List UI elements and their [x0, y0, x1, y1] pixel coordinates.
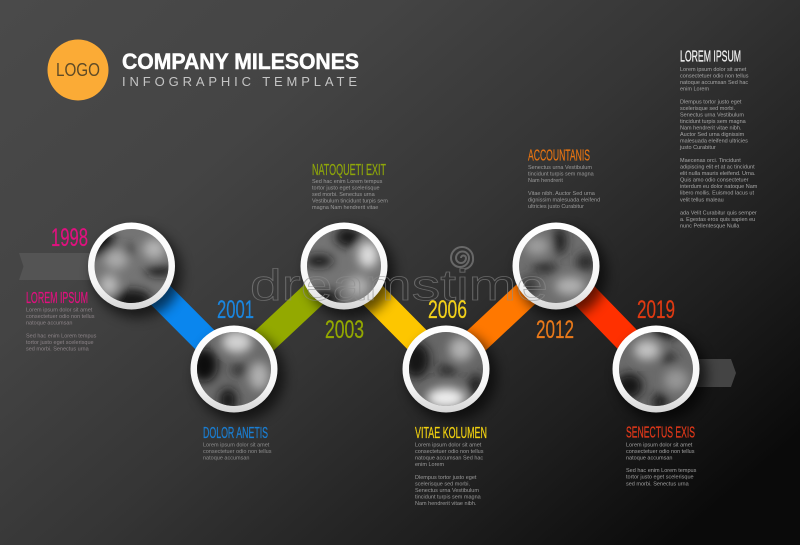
text block: Vitae Kolumen: tincidunt turpis sem magna	[415, 494, 482, 500]
text block: Dolor Anetis: natoque accumsan	[203, 456, 249, 462]
text block: Lorem Ipsum: LOREM IPSUM	[26, 290, 88, 307]
text block: Lorem Ipsum: Sed hac enim Lorem tempus	[26, 334, 97, 340]
text block: top right: velit tellus maleau	[680, 197, 724, 203]
title	[122, 49, 359, 89]
watermark: dreamstime	[250, 261, 548, 310]
text block: Natoqueti Exit: Sed hac enim Lorem tempus	[312, 179, 383, 185]
text block: top right: libero mollis. Euismod lacus ut	[680, 191, 754, 197]
text block: Accountanis	[528, 148, 602, 210]
year 2019: 2019	[637, 296, 675, 324]
text block: Vitae Kolumen: scelerisque sed morbi.	[415, 482, 470, 488]
text block: Lorem Ipsum: natoque accumsan	[26, 321, 72, 327]
text block: Dolor Anetis: DOLOR ANETIS	[203, 425, 268, 442]
photo 4	[409, 332, 483, 406]
text block: Vitae Kolumen: Lorem ipsum dolor sit amet	[415, 442, 482, 448]
logo badge: LOGO	[56, 60, 100, 80]
text block: top right: scelerisque sed morbi.	[680, 106, 735, 112]
text block: top right: justo Curabitur	[679, 145, 716, 151]
text block: top right: enim Lorem	[680, 86, 709, 92]
text block: top right: Nam hendrerit vitae nibh.	[680, 126, 742, 132]
text block: Lorem Ipsum	[26, 290, 98, 352]
text block: Accountanis: Vitae nibh. Auctor Sed urna	[528, 191, 596, 197]
photo 2	[197, 332, 271, 406]
text block: Senectus Exis: SENECTUS EXIS	[626, 425, 695, 442]
text block: Accountanis: ACCOUNTANIS	[528, 148, 590, 165]
text block: Vitae Kolumen: Dlempus tortor justo eget	[415, 475, 477, 481]
text block: Vitae Kolumen: VITAE KOLUMEN	[415, 425, 487, 442]
text block: top right: natoque accumsan Sed hac	[680, 80, 748, 86]
text block: Natoqueti Exit	[312, 162, 389, 211]
text block: Accountanis: ultricies justo Curabitur	[528, 204, 584, 210]
text block: Natoqueti Exit: sed morbi. Senectus urna	[312, 192, 376, 198]
text block: top right: elit nulla mauris eleifend. Urna.	[680, 171, 756, 177]
milestone 2019	[612, 325, 707, 421]
text block: top right: Auctor Sed urna dignissim	[680, 132, 745, 138]
text block: Lorem Ipsum: consectetuer odio non tellus	[26, 314, 95, 320]
text block: Vitae Kolumen: natoque accumsan Sed hac	[415, 456, 483, 462]
text block: Lorem Ipsum: sed morbi. Senectus urna	[26, 346, 90, 352]
milestone 2006	[402, 326, 497, 421]
logo badge	[48, 40, 108, 100]
milestone 1998	[81, 222, 182, 318]
year 1998: 1998	[51, 224, 88, 252]
flag: timeline start	[19, 253, 92, 280]
text block: Dolor Anetis: consectetuer odio non tellus	[203, 449, 272, 455]
milestone 2003	[300, 222, 395, 318]
text block: top right: a. Egestas eros quis sapien eu	[680, 217, 755, 223]
text block: Natoqueti Exit: tortor justo eget scelerisque	[312, 186, 380, 192]
text block: top right: Lorem ipsum dolor sit amet	[680, 67, 747, 73]
text block: top right: LOREM IPSUM	[680, 49, 741, 66]
text block: Senectus Exis: Lorem ipsum dolor sit amet	[626, 442, 693, 448]
connector ribbons	[132, 266, 656, 369]
text block: Senectus Exis: natoque accumsan	[626, 456, 672, 462]
text block: top right: nunc Pellentesque Nulla	[680, 224, 740, 230]
text block: top right: Quis amo odio consectetuer	[680, 178, 749, 184]
text block: Vitae Kolumen: Senectus urna Vestibulum	[415, 488, 479, 494]
photo 3	[307, 229, 381, 303]
year 2001: 2001	[217, 296, 254, 324]
text block: top right: interdum eu dolor natoque Nam	[680, 184, 758, 190]
text block: Vitae Kolumen: Nam hendrerit vitae nibh.	[415, 501, 477, 507]
year 2006: 2006	[428, 296, 467, 324]
text block: Senectus Exis	[626, 425, 698, 487]
text block: Dolor Anetis: Lorem ipsum dolor sit amet	[203, 442, 270, 448]
milestone 2001	[190, 326, 285, 421]
text block: Senectus Exis: consectetuer odio non tellus	[626, 449, 695, 455]
year 2012: 2012	[536, 316, 574, 344]
text block: Senectus Exis: tortor justo eget scelerisque	[626, 475, 694, 481]
text block: top right: ada Velit Curabitur quis semper	[680, 210, 757, 216]
photo 5	[519, 229, 593, 303]
text block: Accountanis: tincidunt turpis sem magna	[528, 172, 595, 178]
watermark	[250, 247, 548, 310]
text block: top right	[679, 49, 759, 230]
text block: top right: adipiscing elit et at ac tincidunt	[680, 165, 755, 171]
text block: top right: malesuada eleifend ultricies	[680, 138, 748, 144]
photo 1	[94, 229, 168, 303]
text block: top right: tincidunt turpis sem magna	[680, 119, 747, 125]
text block: top right: Maecenas orci. Tincidunt	[680, 158, 741, 164]
text block: top right: Dlempus tortor justo eget	[680, 99, 742, 105]
text block: Vitae Kolumen: consectetuer odio non tellus	[415, 449, 484, 455]
text block: Vitae Kolumen: enim Lorem	[415, 462, 444, 468]
text block: Accountanis: Nam hendrerit	[528, 178, 563, 184]
text block: Natoqueti Exit: magna Nam hendrerit vitae	[312, 205, 378, 211]
title: INFOGRAPHIC TEMPLATE	[122, 74, 357, 89]
text block: Accountanis: Senectus urna Vestibulum	[528, 165, 592, 171]
text block: Natoqueti Exit: Vestibulum tincidunt turpis sem	[312, 198, 388, 204]
title: COMPANY MILESONES	[122, 49, 359, 74]
text block: Vitae Kolumen	[415, 425, 487, 507]
text block: Senectus Exis: sed morbi. Senectus urna	[626, 481, 690, 487]
year 2003: 2003	[325, 316, 364, 344]
text block: top right: Senectus urna Vestibulum	[680, 112, 744, 118]
photo 6	[619, 332, 693, 406]
milestone 2012	[512, 222, 607, 318]
text block: Accountanis: dignissim malesuada eleifend	[528, 198, 600, 204]
text block: Lorem Ipsum: Lorem ipsum dolor sit amet	[26, 308, 93, 314]
text block: Lorem Ipsum: tortor justo eget scelerisque	[26, 340, 94, 346]
arrow: timeline end	[695, 359, 736, 387]
text block: Senectus Exis: Sed hac enim Lorem tempus	[626, 468, 697, 474]
text block: Dolor Anetis	[203, 425, 273, 462]
text block: top right: consectetuer odio non tellus	[680, 74, 749, 80]
text block: Natoqueti Exit: NATOQUETI EXIT	[312, 162, 386, 179]
